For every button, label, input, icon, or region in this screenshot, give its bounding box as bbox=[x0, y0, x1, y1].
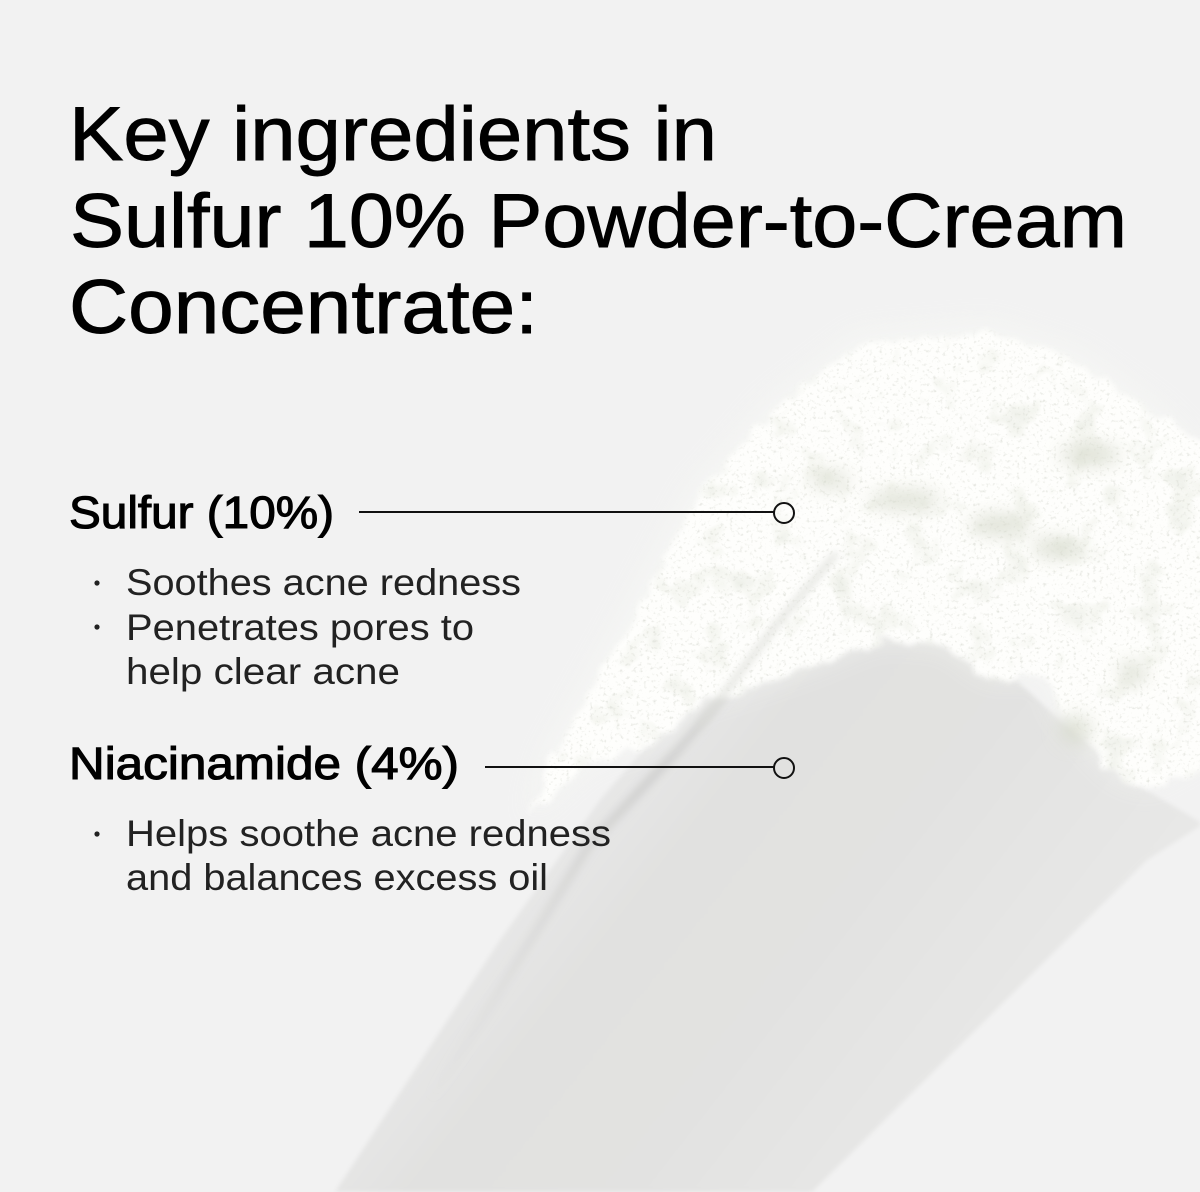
powder halo bbox=[527, 323, 1200, 823]
sulfur callout line bbox=[359, 503, 794, 523]
title bbox=[69, 92, 1127, 350]
cream body bbox=[335, 600, 1200, 1192]
sulfur benefits bbox=[94, 562, 521, 692]
powder olive shadows bbox=[810, 445, 1147, 744]
niacinamide benefits: Helps soothe acne redness bbox=[126, 813, 611, 854]
niacinamide heading: Niacinamide (4%) bbox=[69, 738, 459, 789]
powder pile bbox=[527, 323, 1200, 823]
cream swipe bbox=[335, 600, 1200, 1192]
sulfur benefits: Penetrates pores to bbox=[126, 607, 474, 648]
cream left crease bbox=[430, 665, 750, 1100]
title: Concentrate: bbox=[69, 265, 538, 350]
powder body bbox=[530, 333, 1200, 815]
sulfur benefits: Soothes acne redness bbox=[126, 562, 521, 603]
niacinamide callout line bbox=[485, 758, 794, 778]
powder crease bbox=[700, 555, 835, 725]
ingredient: sulfur bbox=[69, 487, 794, 692]
niacinamide benefits bbox=[94, 813, 611, 898]
sulfur benefits: help clear acne bbox=[126, 651, 400, 692]
niacinamide benefits: and balances excess oil bbox=[126, 857, 548, 898]
sulfur heading: Sulfur (10%) bbox=[69, 487, 334, 538]
title: Sulfur 10% Powder-to-Cream bbox=[70, 179, 1127, 264]
title: Key ingredients in bbox=[69, 92, 717, 177]
ingredient: niacinamide bbox=[69, 738, 794, 898]
